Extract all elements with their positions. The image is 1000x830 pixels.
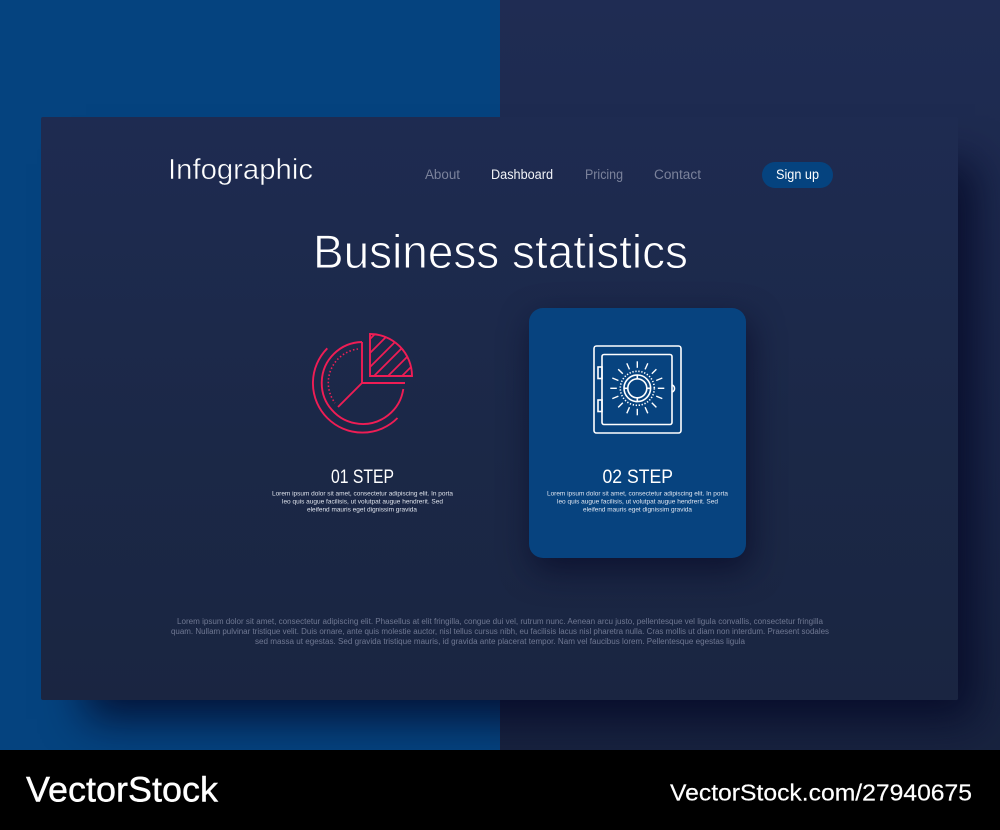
watermark bar: VectorStock.com/27940675 xyxy=(670,780,972,806)
step 02 text: 02 STEP xyxy=(602,466,673,488)
footer paragraph: Lorem ipsum dolor sit amet, consectetur adipiscing elit. Phasellus at elit fringilla, congue dui vel, rutrum nunc. Aenean arcu justo, pellentesque vel ligula convallis, consectetur fringilla xyxy=(177,617,824,626)
background: left blue half xyxy=(0,0,500,750)
navigation: About xyxy=(425,167,460,182)
step 02 text: Lorem ipsum dolor sit amet, consectetur adipiscing elit. In porta xyxy=(547,491,729,498)
navigation: Contact xyxy=(654,167,701,182)
sign up button: Sign up xyxy=(776,167,819,182)
step 01 text xyxy=(272,466,454,514)
step 02 text xyxy=(547,466,729,514)
watermark bar: VectorStock xyxy=(26,770,219,810)
title: Business statistics xyxy=(313,225,688,278)
step 01 text: 01 STEP xyxy=(331,466,394,488)
icon: pie chart xyxy=(312,333,413,434)
footer paragraph xyxy=(171,617,829,646)
header, title and step 01 xyxy=(168,154,833,514)
panel: main card xyxy=(41,117,958,700)
navigation: Dashboard xyxy=(491,167,553,182)
step 02 text: leo quis augue facilisis, ut volutpat augue hendrerit. Sed xyxy=(557,499,719,506)
navigation xyxy=(425,167,701,182)
step 02 text: eleifend mauris eget dignissim gravida xyxy=(583,507,693,514)
panel: step 02 card xyxy=(529,308,746,558)
logo heading: Infographic xyxy=(168,154,313,186)
safe dial rays xyxy=(610,361,664,415)
watermark bar xyxy=(0,750,1000,830)
background: right navy half xyxy=(500,0,1000,750)
sign up button xyxy=(762,162,833,188)
step 01 text: leo quis augue facilisis, ut volutpat augue hendrerit. Sed xyxy=(282,499,444,506)
step 01 text: Lorem ipsum dolor sit amet, consectetur adipiscing elit. In porta xyxy=(272,491,454,498)
footer paragraph: quam. Nullam pulvinar tristique velit. Duis ornare, ante quis molestie auctor, nisl tellus cursus nibh, eu facilisis lacus nisl pharetra nulla. Cras mollis ut diam non interdum. Praesent sodales xyxy=(171,627,829,636)
footer paragraph: sed massa ut egestas. Sed gravida tristique mauris, id gravida ante placerat tempor. Nam vel faucibus lorem. Pellentesque egestas ligula xyxy=(255,637,746,646)
step 01 text: eleifend mauris eget dignissim gravida xyxy=(307,507,418,514)
navigation: Pricing xyxy=(585,167,623,182)
icon: safe xyxy=(594,346,681,433)
